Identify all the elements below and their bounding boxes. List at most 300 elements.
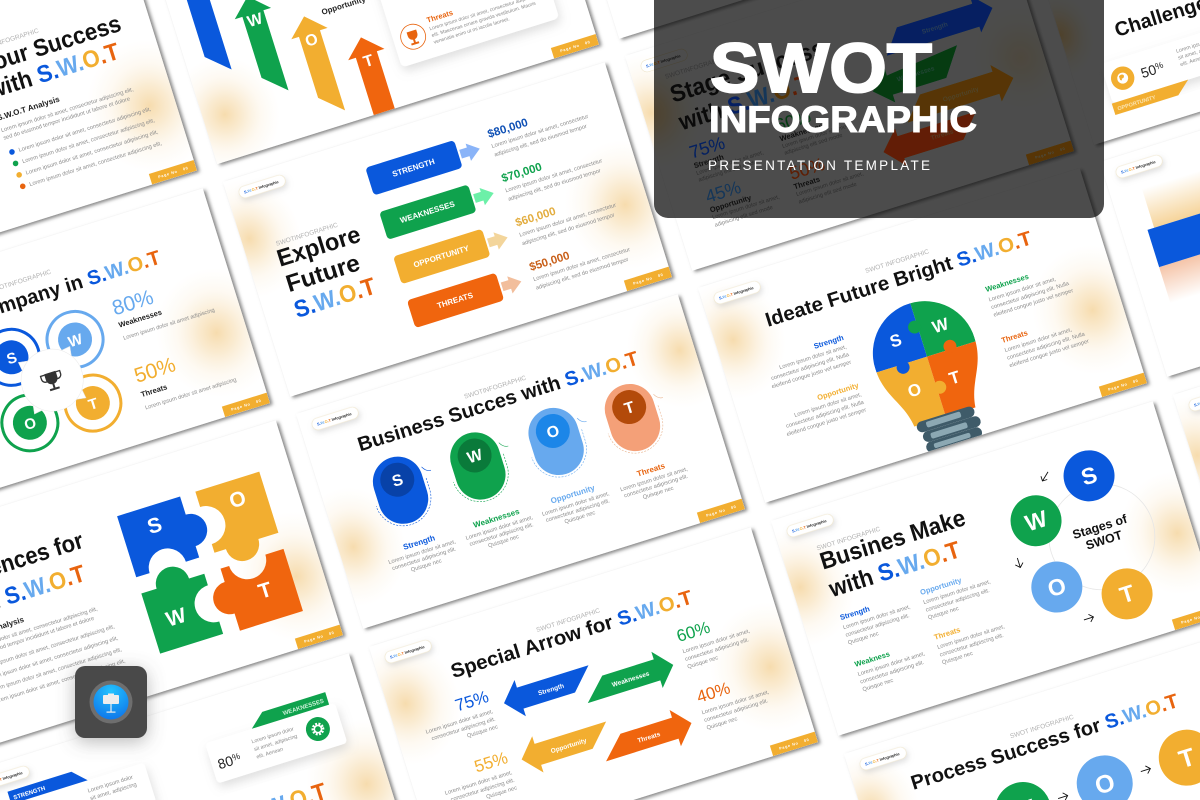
light bulb puzzle: W — [930, 314, 952, 337]
page tab: 00 — [657, 273, 664, 278]
slide background — [1173, 275, 1200, 610]
title line two: with S.W.O.T — [675, 70, 814, 136]
stat: 60 percent: Quisque nec — [687, 655, 719, 670]
slide: Process Success — [808, 634, 1200, 800]
label: Strength: Lorem ipsum dolor sit amet, — [388, 539, 457, 566]
text: weaknesses: Lorem ipsum dolor sit amet adipiscing — [123, 308, 216, 342]
stat: 75 percent: Lorem ipsum dolor sit amet, — [696, 150, 765, 177]
slide content — [0, 250, 270, 452]
title: Ideate Future Bright S.W.O.T — [763, 228, 1035, 332]
stat: 75 percent — [418, 687, 499, 751]
label: Weaknesses: Weaknesses — [117, 308, 163, 330]
logo pill — [310, 406, 360, 431]
label: Strength: Strength — [402, 533, 436, 552]
arrow: W — [234, 0, 288, 90]
text: Threats: Threats — [1000, 328, 1029, 345]
arrow: Opportunity: Opportunity — [942, 86, 980, 104]
stat: 40 percent: Quisque nec — [706, 716, 738, 732]
card: weaknesses: 80 — [216, 752, 235, 772]
title: Stage Success — [667, 35, 828, 108]
pill: W — [441, 423, 522, 509]
row: Strength: STRENGTH — [391, 157, 436, 179]
card: weaknesses: elit. Aenean — [256, 747, 284, 761]
row: Strength — [365, 99, 592, 196]
arrow: S — [186, 0, 232, 70]
arrow: Weaknesses: Weaknesses — [896, 65, 936, 84]
page tab: 00 — [1059, 147, 1066, 152]
text: threats: Lorem ipsum dolor sit amet adipiscing — [145, 377, 237, 411]
slide background — [150, 0, 599, 164]
card: opportunity — [1100, 15, 1200, 115]
card: weaknesses: Lorem ipsum dolor — [251, 726, 295, 745]
page tab: Page No — [1108, 382, 1128, 392]
logo pill: S.W.O.T Infographic — [865, 752, 900, 767]
card: weaknesses: % — [231, 751, 241, 763]
card: strength — [0, 750, 157, 800]
arrow: Weaknesses — [579, 647, 679, 711]
stat: 50 percent: Lorem ipsum dolor sit amet, — [796, 171, 865, 198]
row: Threats: $50,000 — [528, 250, 571, 274]
arrow: Strength — [498, 658, 597, 721]
text: Strength — [839, 592, 916, 646]
text: Threats: Lorem ipsum dolor sit amet, — [937, 624, 1006, 651]
stage cycle diagram: T — [1116, 579, 1138, 608]
pill: S — [364, 447, 445, 533]
text: Weaknesses: Lorem ipsum dolor sit amet, — [988, 277, 1057, 303]
stat: 75 percent: Lorem ipsum dolor sit amet, — [425, 709, 494, 736]
arrow: Threats — [597, 705, 697, 769]
slide content — [186, 0, 599, 158]
text: Weakness: consectetur adipiscing elit. — [860, 660, 925, 686]
logo pill: S.W.O.T Infographic — [646, 54, 681, 69]
heading: SWOT: SWOT — [710, 29, 932, 107]
stat: 40 percent: Lorem ipsum dolor sit amet, — [701, 689, 770, 716]
text: Opportunity — [919, 567, 997, 621]
slide: Stage Success (under overlay) — [583, 0, 1105, 284]
text: Strength — [763, 333, 853, 390]
text: Weakness: Quisque nec — [862, 678, 894, 693]
slide: Special Arrow — [335, 516, 853, 800]
card: weaknesses: sit amet, adipiscing — [253, 734, 298, 753]
stat: 60 percent — [773, 95, 853, 157]
center trophy — [18, 346, 86, 414]
row: Weaknesses: Lorem ipsum dolor sit amet, consectetur — [505, 158, 603, 194]
slide content — [1130, 382, 1200, 528]
slide content — [0, 452, 374, 750]
stat: 60 percent: Lorem ipsum dolor sit amet, — [682, 628, 751, 655]
text: Strength: Lorem ipsum dolor sit amet, — [779, 344, 848, 371]
stage cycle diagram: Stages of — [1071, 512, 1130, 542]
stat: 45 percent: 45% — [703, 177, 743, 207]
text: Strength: eleifend congue justo vel semper — [771, 360, 852, 390]
title: Business Succes with S.W.O.T — [355, 348, 641, 456]
label: Strength — [384, 528, 461, 579]
label: Opportunity: Quisque nec — [564, 510, 596, 525]
slide: Challenges — [994, 0, 1200, 155]
pill: O: O — [545, 422, 562, 442]
arrow: Strength: Strength — [921, 21, 949, 36]
circle: O — [1070, 748, 1140, 800]
logo pill: S.W.O.T Infographic — [792, 519, 827, 534]
label: Weaknesses: consectetur adipiscing elit. — [469, 522, 535, 548]
stat: 60 percent: 60% — [674, 618, 712, 646]
page tab — [697, 499, 745, 523]
page tab — [1172, 606, 1200, 630]
pill: T — [596, 375, 677, 460]
text: Weaknesses — [984, 260, 1074, 319]
text: Threats: eleifend congue justo vel semper — [1009, 339, 1090, 369]
stat: 75 percent — [687, 122, 767, 184]
row: Strength: Lorem ipsum dolor sit amet, consectetur — [491, 114, 589, 150]
stage cycle diagram — [989, 437, 1179, 647]
ring: S — [0, 328, 40, 387]
stat: 50 percent: adipiscing elit sed mode — [798, 182, 858, 206]
pill: O — [519, 399, 600, 484]
page tab: Page No — [633, 276, 653, 286]
slide background — [1100, 42, 1200, 377]
row: Opportunity — [393, 188, 620, 285]
title: Process Success for S.W.O.T — [908, 690, 1181, 795]
logo pill — [383, 639, 433, 664]
stat: 60 percent: 60% — [773, 106, 813, 136]
label: Opportunity: Opportunity — [550, 483, 596, 506]
card: opportunity: % — [1154, 60, 1165, 72]
page tab — [1026, 141, 1074, 165]
arrow: Opportunity: Opportunity — [550, 737, 588, 755]
slide content — [809, 652, 1200, 800]
text: Opportunity: consectetur adipiscing elit. — [925, 588, 991, 614]
puzzle piece W — [136, 558, 223, 654]
arrow: T: T — [361, 52, 376, 71]
light bulb puzzle: T — [947, 367, 963, 388]
eyebrow: SWOT INFOGRAPHIC — [536, 607, 601, 634]
logo pill: S.W.O.T Infographic — [719, 286, 754, 301]
label: Strength: consectetur adipiscing elit. — [392, 546, 457, 572]
pill: T: T — [622, 399, 637, 418]
slide background — [0, 188, 270, 523]
text: Opportunity: Opportunity — [919, 575, 963, 597]
stat: 55 percent: Lorem ipsum dolor sit amet, — [444, 770, 514, 797]
row: Opportunity: Lorem ipsum dolor sit amet, consectetur — [519, 203, 617, 239]
stat: 50 percent: Threats — [793, 175, 821, 191]
stage cycle diagram: S — [1078, 461, 1100, 491]
arrow: Strength — [877, 0, 998, 61]
text: Weakness — [853, 639, 931, 693]
page tab — [770, 732, 818, 756]
page tab: 00 — [730, 505, 737, 510]
slide: right edge — [1128, 275, 1200, 624]
stat: 45 percent: Lorem ipsum dolor sit amet, — [712, 194, 781, 221]
text: Threats: consectetur adipiscing elit. — [939, 633, 1005, 658]
ring: S: S — [5, 349, 19, 368]
logo pill — [1114, 154, 1164, 179]
title: Special Arrow for S.W.O.T — [448, 587, 695, 683]
slide content — [1114, 125, 1200, 307]
title: Busines Make — [817, 505, 969, 575]
row: Opportunity: adipiscing elit, sed do eiusmod tempor — [521, 213, 616, 247]
circle: T — [1152, 723, 1200, 793]
blue bar — [1147, 191, 1200, 267]
arrow: W to O — [1057, 792, 1069, 800]
text: Opportunity: eleifend congue justo vel semper — [786, 407, 867, 438]
slide background — [698, 168, 1147, 503]
logo pill: S.W.O.T Infographic — [390, 645, 425, 660]
ring: W — [45, 310, 105, 368]
stat: 75 percent: consectetur adipiscing elit. — [431, 717, 497, 742]
stat: 55 percent — [437, 748, 518, 800]
stat: 45 percent: Opportunity — [709, 193, 753, 214]
paragraph: sed do eiusmod tempor incididunt ut labore et dolore — [3, 96, 131, 142]
logo pill — [785, 513, 835, 538]
arrow: W: W — [245, 10, 266, 31]
stat: 55 percent: 55% — [472, 748, 510, 776]
text: Threats — [933, 612, 1011, 666]
label: Threats: Lorem ipsum dolor sit amet, — [620, 466, 689, 493]
text: Weaknesses: eleifend congue justo vel semper — [993, 288, 1074, 319]
stat: 40 percent — [694, 668, 775, 732]
page tab — [551, 34, 599, 59]
page tab — [222, 393, 270, 417]
stage cycle diagram: SWOT — [1084, 528, 1124, 553]
arrow: O — [291, 16, 345, 110]
logo pill: S.W.O.T Infographic — [317, 412, 352, 427]
page tab: Page No — [158, 169, 178, 179]
eyebrow: SWOTINFOGRAPHIC — [275, 222, 339, 248]
text: Threats: consectetur adipiscing elit. Nulla — [1006, 331, 1087, 362]
arrow: O: O — [303, 31, 320, 51]
info card — [371, 0, 559, 67]
slide background — [844, 634, 1200, 800]
stat: 60 percent — [674, 606, 756, 671]
stat: 45 percent: adipiscing elit sed mode — [714, 205, 774, 229]
slide background — [0, 0, 197, 290]
stat: 40 percent: consectetur adipiscing elit. — [704, 698, 769, 724]
eyebrow: SWOT INFOGRAPHIC — [865, 248, 930, 275]
text: Opportunity: Quisque nec — [927, 606, 960, 621]
arrow: Threats: Threats — [637, 731, 662, 745]
stat: 75 percent: 75% — [687, 133, 727, 163]
arrow: Threats — [878, 104, 985, 171]
light bulb puzzle: S — [888, 330, 904, 352]
slide content — [228, 114, 672, 328]
bullet list: Lorem ipsum dolor sit amet, consectetur adipiscing elit, — [25, 129, 160, 177]
stat: 40 percent: 40% — [694, 678, 732, 707]
stat: 50 percent: 50% — [787, 154, 827, 184]
bullet list: Lorem ipsum dolor sit amet, consectetur adipiscing elit, — [29, 141, 163, 188]
slide: blue bar — [1100, 42, 1200, 377]
stat: 50 percent — [787, 143, 867, 206]
page tab — [149, 160, 197, 185]
text: Strength: consectetur adipiscing elit. Nulla — [770, 352, 851, 382]
label: Strength: Quisque nec — [410, 558, 443, 574]
text: Strength: consectetur adipiscing elit. — [845, 613, 911, 639]
slide: Busines Make — [727, 389, 1200, 749]
puzzle piece O: O — [226, 486, 249, 513]
logo pill — [858, 746, 908, 771]
row: Weaknesses: adipiscing elit, sed do eiusmod tempor — [508, 168, 602, 203]
text: Weakness: Weakness — [853, 649, 891, 669]
stat: 45 percent — [703, 167, 783, 229]
title line two: Future — [283, 250, 363, 298]
card: weaknesses — [201, 690, 347, 784]
stat: 60 percent: consectetur adipiscing elit. — [684, 637, 750, 663]
title line two: with S.W.O.T — [825, 536, 964, 603]
light bulb puzzle: O — [905, 379, 924, 401]
eyebrow: SWOT INFOGRAPHIC — [816, 526, 882, 552]
text: Opportunity: Opportunity — [816, 380, 860, 402]
slide background — [552, 0, 1001, 39]
text: Opportunity: Lorem ipsum dolor sit amet, — [794, 392, 863, 419]
row: Weaknesses: $70,000 — [500, 161, 543, 185]
puzzle piece O — [195, 472, 283, 569]
slide content — [666, 159, 1176, 515]
label: Threats: Quisque nec — [642, 486, 675, 501]
row: Weaknesses — [379, 143, 606, 241]
title line three: S.W.O.T — [291, 273, 379, 324]
page tab — [624, 267, 672, 291]
info card: venenatis enim ut mi iaculis laoreet. — [433, 16, 510, 46]
page tab: Page No — [231, 402, 251, 412]
info card: Threats — [426, 8, 454, 25]
info card: elit. Maecenas ornare gravida vestibulum. Mauris — [431, 1, 537, 39]
circle: O: O — [1092, 768, 1118, 800]
stat: 80 percent: 80% — [109, 286, 156, 320]
text: Opportunity: Lorem ipsum dolor sit amet, — [923, 579, 992, 606]
text: Opportunity: consectetur adipiscing elit. Nulla — [785, 400, 866, 430]
slide background — [0, 653, 416, 800]
stat: 75 percent: adipiscing elit sed mode — [698, 160, 757, 184]
circle: W — [988, 775, 1058, 800]
heading: INFOGRAPHIC: INFOGRAPHIC — [709, 99, 977, 140]
puzzle piece W: W — [163, 604, 189, 632]
arrow: O to T — [1140, 765, 1152, 775]
text: Threats: Quisque nec — [941, 651, 974, 666]
slide: Explore Future SWOT — [224, 62, 676, 400]
text: Weakness: Lorem ipsum dolor sit amet, — [857, 651, 926, 678]
text: Weaknesses: Weaknesses — [984, 272, 1030, 294]
circle: T: T — [1176, 743, 1199, 774]
title: Explore — [274, 221, 364, 273]
logo pill — [237, 174, 287, 199]
slide background — [296, 294, 745, 629]
pill: S: S — [390, 471, 406, 491]
page tab: 00 — [584, 40, 591, 46]
stat: 75 percent: Strength — [693, 152, 725, 170]
label: Threats — [616, 455, 693, 507]
icon: Keynote app badge — [65, 660, 157, 752]
page tab: 00 — [328, 631, 335, 636]
slide background — [1027, 0, 1200, 145]
arrow: T — [348, 37, 395, 116]
row: Strength: $80,000 — [486, 117, 530, 141]
text: Strength: Lorem ipsum dolor sit amet, — [842, 604, 912, 631]
ring: O: O — [22, 414, 39, 434]
slide content — [336, 519, 853, 800]
slide content — [259, 280, 780, 640]
ring: W: W — [66, 330, 86, 351]
row: Opportunity: $60,000 — [514, 206, 557, 230]
stat: 75 percent: Quisque nec — [466, 724, 499, 740]
bullet list — [8, 106, 163, 191]
slide content — [730, 399, 1200, 749]
row: Threats: adipiscing elit, sed do eiusmod tempor — [535, 257, 630, 292]
slide content — [1013, 0, 1200, 134]
slide: cards — [0, 642, 452, 800]
page tab: 00 — [255, 399, 262, 404]
slide background — [771, 401, 1200, 736]
label: Threats: Threats — [140, 382, 168, 399]
slide: Business Succes — [259, 280, 780, 640]
row: Threats — [407, 232, 634, 330]
logo pill: S.W.O.T Infographic — [244, 180, 279, 195]
slide content — [584, 0, 1105, 284]
page tab: Page No — [706, 508, 726, 518]
stage cycle diagram: W — [1022, 505, 1051, 536]
card: opportunity: OPPORTUNITY — [1117, 95, 1157, 112]
stat: 60 percent: Lorem ipsum dolor sit amet, — [782, 123, 851, 150]
text: Strength: Quisque nec — [847, 631, 880, 646]
stat: 75 percent: 75% — [453, 687, 491, 715]
slide background — [369, 527, 818, 800]
page tab: Page No — [1035, 150, 1055, 160]
page tab: 00 — [182, 166, 189, 172]
slide background — [625, 0, 1074, 271]
eyebrow: SWOT INFOGRAPHIC — [1009, 714, 1075, 740]
page tab: 00 — [1132, 379, 1139, 384]
row: Strength: adipiscing elit, sed do eiusmod tempor — [494, 124, 588, 158]
row: Weaknesses: WEAKNESSES — [399, 199, 457, 225]
arrow: Opportunity — [899, 60, 1019, 130]
arrow: Strength: Strength — [537, 683, 565, 697]
arrow: Threats: Threats — [930, 128, 955, 142]
label: Threats: consectetur adipiscing elit. — [623, 474, 689, 499]
slide: Company in SWOT — [0, 188, 274, 492]
stat: 60 percent: adipiscing elit sed mode — [784, 133, 843, 157]
logo pill — [712, 280, 762, 305]
stage cycle diagram: O — [1044, 572, 1069, 602]
slide: puzzle — [0, 411, 374, 755]
text: Threats: Lorem ipsum dolor sit amet, — [1004, 327, 1073, 354]
ring: T: T — [86, 395, 100, 414]
eyebrow: SWOTINFOGRAPHIC — [463, 375, 527, 401]
bullet list: Lorem ipsum dolor sit amet, consectetur adipiscing elit, — [18, 106, 152, 154]
page tab: Page No — [304, 634, 324, 644]
text: Threats: Threats — [933, 625, 962, 642]
page tab: Page No — [560, 43, 580, 53]
row: Threats: THREATS — [436, 290, 475, 310]
paragraph: Lorem ipsum dolor sit amet, consectetur adipiscing elit, — [0, 87, 135, 134]
slide: top middle — [552, 0, 1001, 39]
logo pill — [0, 765, 31, 790]
label: Opportunity: consectetur adipiscing elit. — [545, 498, 611, 524]
light bulb puzzle — [853, 278, 1010, 463]
card: weaknesses: WEAKNESSES — [282, 699, 325, 717]
arrow: Opportunity — [516, 714, 615, 778]
slide background — [0, 420, 343, 755]
label: Weaknesses — [462, 503, 538, 555]
puzzle piece T: T — [256, 578, 275, 604]
logo pill — [639, 48, 689, 73]
dark title overlay panel — [654, 0, 1104, 218]
label: Weaknesses: Lorem ipsum dolor sit amet, — [465, 515, 534, 542]
logo pill — [1187, 387, 1200, 412]
subheading: presentation template: PRESENTATION TEMPLATE — [708, 158, 930, 173]
puzzle piece T — [205, 549, 303, 636]
bullet list: Lorem ipsum dolor sit amet, consectetur adipiscing elit, — [22, 118, 156, 165]
card: strength: Lorem ipsum dolor — [87, 775, 134, 794]
puzzle piece S: S — [145, 513, 165, 539]
logo pill: S.W.O.T Infographic — [1121, 160, 1156, 175]
